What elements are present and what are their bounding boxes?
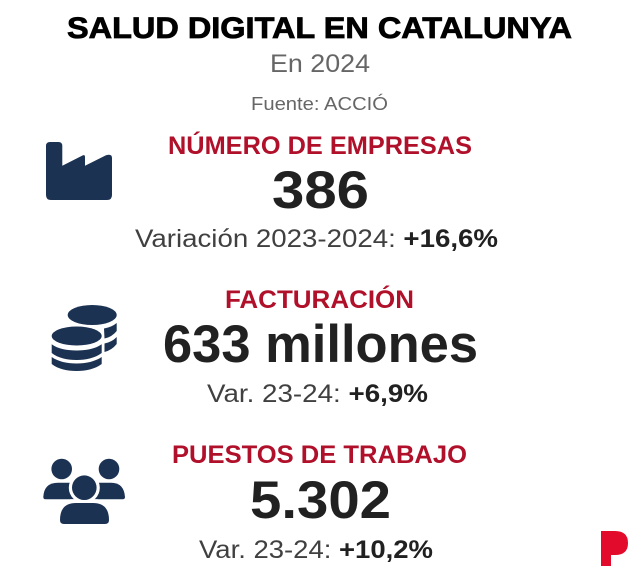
panel: puestos de trabajo [43,441,467,564]
value: 386: 386 [272,161,369,220]
panel: facturación [52,284,478,408]
panel: número de empresas [46,130,498,253]
variation: puestos: Var. 23-24: +10,2% [199,536,433,564]
heading: puestos de trabajo: PUESTOS DE TRABAJO [172,441,467,469]
variation: facturación: Var. 23-24: +6,9% [207,380,428,408]
source note: Fuente: ACCIÓ [251,93,388,114]
logo: red P [601,531,628,566]
value: 633 millones: 633 millones [163,315,478,374]
heading: número de empresas: NÚMERO DE EMPRESAS [168,130,472,160]
icon: coins [52,305,117,371]
variation: empresas: Variación 2023-2024: +16,6% [135,225,498,253]
icon: factory [46,142,112,200]
heading: facturación: FACTURACIÓN [225,284,414,314]
subtitle: year: En 2024 [270,50,370,78]
icon: people [43,459,125,524]
value: 5.302: 5.302 [250,471,391,530]
title: SALUD DIGITAL EN CATALUNYA [67,12,572,45]
